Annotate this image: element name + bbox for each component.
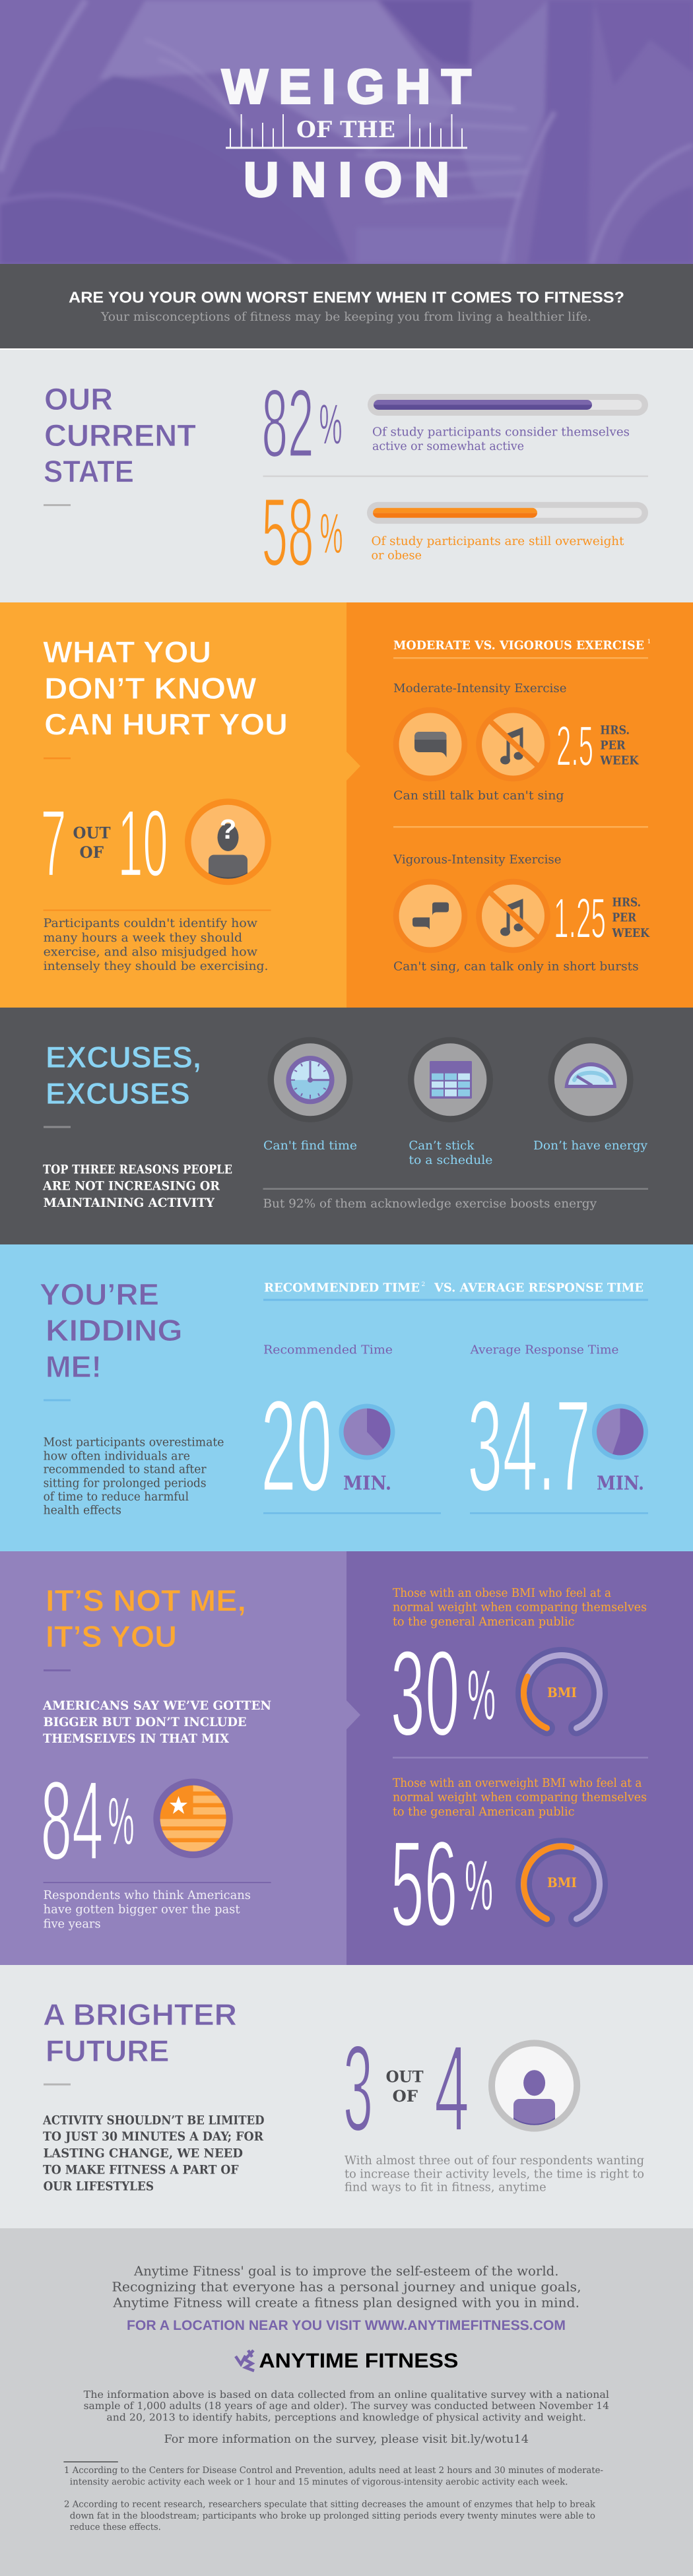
stat: 7 out of 10 xyxy=(41,790,168,896)
stat: 3 out of 4 xyxy=(343,2020,469,2157)
stat: 58%: 58 xyxy=(261,478,314,587)
icon: energy gauge xyxy=(548,1037,634,1122)
heading: our current state xyxy=(44,381,196,489)
text: top three reasons: TOP THREE REASONS PEOPLE xyxy=(43,1163,232,1176)
panel: a brighter future xyxy=(0,1965,693,2228)
footnote 1: intensity aerobic activity each week or 1 hour and 15 minutes of vigorous-intensity aerobic activity each week. xyxy=(70,2476,568,2487)
pie chart: 20 minutes xyxy=(339,1404,395,1460)
heading: it's not me, it's you: IT’S NOT ME, xyxy=(46,1584,246,1618)
text: survey information xyxy=(84,2389,609,2446)
label: vigorous-intensity exercise: Vigorous-Intensity Exercise xyxy=(393,853,561,867)
text: most participants overestimate: how often individuals are xyxy=(44,1449,190,1463)
panel: excuses xyxy=(0,1008,693,1244)
text: overweight bmi: to the general American public xyxy=(393,1805,574,1819)
title: Weight of the Union xyxy=(222,59,471,207)
heading: you're kidding me: KIDDING xyxy=(46,1313,183,1347)
icon: talking xyxy=(393,707,467,781)
text: participants couldn't identify: intensely they should be exercising. xyxy=(44,959,268,973)
caption: can't sing: Can't sing, can talk only in short bursts xyxy=(393,960,639,974)
icon: person xyxy=(488,2040,580,2139)
panel: you're kidding me xyxy=(0,1244,693,1551)
labels: excuses: Can’t stick xyxy=(409,1139,475,1153)
gauge: bmi 56%: BMI xyxy=(547,1875,577,1890)
text: respondents who think xyxy=(44,1888,251,1931)
gauge: bmi 30% xyxy=(523,1655,599,1728)
heading: excuses, excuses: EXCUSES, xyxy=(46,1040,201,1074)
panel: our current state xyxy=(0,350,693,602)
icon: no singing xyxy=(476,879,550,953)
text: with almost three out of four: find ways to fit in fitness, anytime xyxy=(345,2181,546,2195)
text: participants couldn't identify xyxy=(44,917,268,973)
text: obese bmi: normal weight when comparing themselves xyxy=(393,1601,647,1615)
stat: 1.25 hrs per week: 1.25 xyxy=(554,887,606,950)
panel: bmi perception (right) xyxy=(346,1551,693,1965)
pie chart: 34.7 minutes xyxy=(592,1404,648,1460)
text: obese bmi: Those with an obese BMI who feel at a xyxy=(393,1586,611,1600)
stat: 2.5 hrs per week: 2.5 xyxy=(556,715,593,778)
text: activity shouldn't be limited: TO JUST 30 MINUTES A DAY; FOR xyxy=(43,2130,264,2144)
stat: 3 out of 4: OUT xyxy=(386,2067,424,2086)
text: respondents who think: have gotten bigger over the past xyxy=(44,1903,240,1917)
caption: can still talk: Can still talk but can't sing xyxy=(393,789,564,802)
stat: 1.25 hrs per week: HRS. xyxy=(612,895,641,909)
heading: what you don't know can hurt you: CAN HURT YOU xyxy=(44,707,288,742)
text: overweight bmi: normal weight when comparing themselves xyxy=(393,1791,647,1805)
logo: anytime fitness: ANYTIME FITNESS xyxy=(259,2349,458,2372)
stat: 3 out of 4: OF xyxy=(393,2086,418,2106)
panel: you're kidding me: 20 xyxy=(261,1372,332,1519)
stat: 30%: 30 xyxy=(391,1626,459,1762)
text: activity shouldn't be limited: LASTING CHANGE, WE NEED xyxy=(44,2146,243,2160)
heading: what you don't know can hurt you: DON’T KNOW xyxy=(44,671,257,705)
icon: calendar xyxy=(408,1037,493,1122)
heading: recommended vs average: VS. AVERAGE RESPONSE TIME xyxy=(434,1281,644,1295)
text: activity shouldn't be limited: ACTIVITY SHOULDN’T BE LIMITED xyxy=(42,2113,265,2127)
title: Weight of the Union: OF THE xyxy=(296,117,395,143)
text: anytime fitness goal: Anytime Fitness will create a fitness plan designed with you in mind. xyxy=(112,2296,579,2311)
text: most participants overestimate: sitting for prolonged periods xyxy=(44,1476,207,1490)
progress bar: 82% xyxy=(368,394,648,416)
panel: it's not me (left) xyxy=(0,1551,346,1965)
text: americans say: BIGGER BUT DON’T INCLUDE xyxy=(44,1716,247,1729)
caption: 58%: Of study participants are still overweight xyxy=(371,534,624,548)
stat: 82%: 82 xyxy=(261,370,314,478)
title: Weight of the Union: WEIGHT xyxy=(222,59,471,113)
caption: 82%: active or somewhat active xyxy=(372,439,524,453)
heading: you're kidding me: YOU’RE xyxy=(40,1277,159,1312)
labels: excuses xyxy=(263,1139,648,1167)
heading: excuses, excuses: EXCUSES xyxy=(46,1076,190,1111)
text: with almost three out of four: to increase their activity levels, the time is right to xyxy=(345,2168,644,2181)
text: activity shouldn't be limited xyxy=(42,2113,265,2193)
text: most participants overestimate xyxy=(44,1436,224,1517)
intro subtitle: Your misconceptions of fitness may be keeping you from living a healthier life. xyxy=(100,310,591,324)
text: top three reasons: MAINTAINING ACTIVITY xyxy=(44,1196,215,1210)
labels: excuses: Can't find time xyxy=(263,1139,357,1153)
stat: 1.25 hrs per week: WEEK xyxy=(612,926,650,940)
text: most participants overestimate: health effects xyxy=(44,1503,121,1517)
heading: a brighter future xyxy=(43,1997,237,2068)
panel: footer xyxy=(0,2228,693,2576)
heading: recommended vs average: RECOMMENDED TIME xyxy=(264,1281,420,1295)
heading: you're kidding me xyxy=(40,1277,183,1384)
heading: what you don't know can hurt you: WHAT YOU xyxy=(43,635,211,669)
heading: you're kidding me: ME! xyxy=(46,1349,102,1384)
text: top three reasons xyxy=(42,1163,232,1210)
icon: confused person xyxy=(185,798,271,888)
caption: 58%: or obese xyxy=(371,549,422,563)
text: overweight bmi xyxy=(393,1776,647,1819)
icon: short bursts xyxy=(393,879,467,953)
stat: 1.25 hrs per week: PER xyxy=(612,911,637,925)
stat: 56%: 56 xyxy=(391,1816,458,1952)
footnote 2 xyxy=(64,2499,596,2532)
text: activity shouldn't be limited: OUR LIFESTYLES xyxy=(44,2179,154,2193)
text: survey information: For more information on the survey, please visit bit.ly/wotu14 xyxy=(164,2433,529,2446)
stat: 3 out of 4: 4 xyxy=(434,2020,469,2157)
panel: our current state: % xyxy=(319,502,343,565)
text: survey information: The information above is based on data collected from an online qualitative survey with a national xyxy=(84,2389,609,2400)
heading: our current state: STATE xyxy=(44,454,134,489)
stat: 7 out of 10: OUT xyxy=(73,823,111,843)
text: overweight bmi: Those with an overweight BMI who feel at a xyxy=(393,1776,642,1790)
panel: what you don't know (left): 10 xyxy=(117,790,168,896)
text: most participants overestimate: of time to reduce harmful xyxy=(44,1490,189,1504)
text: anytime fitness goal: Anytime Fitness' goal is to improve the self-esteem of the world. xyxy=(133,2263,558,2279)
panel: hero header xyxy=(0,0,693,264)
heading: it's not me, it's you xyxy=(46,1584,246,1654)
text: activity shouldn't be limited: TO MAKE FITNESS A PART OF xyxy=(43,2163,239,2177)
labels: excuses: to a schedule xyxy=(409,1153,492,1167)
heading: excuses, excuses xyxy=(46,1040,201,1111)
icon: confused person: ? xyxy=(220,814,236,845)
labels: excuses: Don’t have energy xyxy=(533,1139,648,1153)
panel: bmi perception (right): % xyxy=(465,1845,493,1925)
panel: moderate vs vigorous (right) xyxy=(346,602,693,1008)
panel: it's not me (left): % xyxy=(108,1784,135,1859)
text: 92% acknowledge: But 92% of them acknowledge exercise boosts energy xyxy=(263,1197,597,1211)
footnote 2: reduce these effects. xyxy=(70,2522,161,2532)
text: anytime fitness goal xyxy=(112,2263,581,2311)
text: participants couldn't identify: many hours a week they should xyxy=(44,931,242,945)
heading: a brighter future: FUTURE xyxy=(46,2034,169,2068)
caption: 82%: Of study participants consider themselves xyxy=(372,426,630,439)
heading: recommended vs average: 2 xyxy=(421,1281,425,1288)
footnote 2: down fat in the bloodstream; participants who broke up prolonged sitting periods every twenty minutes were able to xyxy=(70,2511,595,2521)
stat: 2.5 hrs per week: HRS. xyxy=(600,723,630,738)
text: most participants overestimate: recommended to stand after xyxy=(44,1463,207,1477)
panel: our current state: % xyxy=(319,393,342,457)
heading: our current state: CURRENT xyxy=(44,418,196,453)
icon: american flag xyxy=(153,1779,233,1858)
heading: what you don't know can hurt you xyxy=(43,635,288,742)
text: americans say xyxy=(42,1699,271,1746)
footnote 2: 2 According to recent research, researchers speculate that sitting decreases the amount of enzymes that help to break xyxy=(64,2499,596,2510)
icon: clock xyxy=(267,1037,353,1122)
heading: our current state: OUR xyxy=(44,381,113,416)
heading: moderate vs vigorous exercise: MODERATE VS. VIGOROUS EXERCISE xyxy=(393,639,644,653)
heading: moderate vs vigorous exercise: 1 xyxy=(647,639,651,645)
label: min: MIN. xyxy=(343,1472,391,1495)
text: obese bmi xyxy=(393,1586,647,1628)
stat: 84%: 84 xyxy=(41,1758,103,1884)
text: americans say: THEMSELVES IN THAT MIX xyxy=(43,1732,230,1746)
stat: 2.5 hrs per week: WEEK xyxy=(599,754,640,767)
text: respondents who think: Respondents who think Americans xyxy=(44,1888,251,1902)
text: obese bmi: to the general American public xyxy=(393,1615,574,1628)
text: participants couldn't identify: Participants couldn't identify how xyxy=(44,917,258,930)
caption: 82% xyxy=(372,426,630,453)
title: Weight of the Union: UNION xyxy=(244,152,449,207)
gauge: bmi 30%: BMI xyxy=(547,1685,577,1700)
progress bar: 58% xyxy=(367,502,648,524)
text: top three reasons: ARE NOT INCREASING OR xyxy=(42,1180,220,1194)
label: recommended time: Recommended Time xyxy=(263,1343,393,1357)
stat: 3 out of 4: 3 xyxy=(343,2020,373,2157)
caption: 58% xyxy=(371,534,624,563)
text: with almost three out of four xyxy=(345,2154,644,2195)
stat: 2.5 hrs per week: PER xyxy=(600,738,626,752)
call to action: FOR A LOCATION NEAR YOU VISIT WWW.ANYTIMEFITNESS.COM xyxy=(127,2318,566,2333)
text: participants couldn't identify: exercise, and also misjudged how xyxy=(44,945,258,959)
footnote 1: 1 According to the Centers for Disease Control and Prevention, adults need at least 2 hours and 30 minutes of moderate- xyxy=(64,2465,603,2476)
heading: recommended vs average xyxy=(264,1281,644,1295)
icon: no singing xyxy=(476,707,550,781)
gauge: bmi 56% xyxy=(523,1846,599,1919)
panel: intro band xyxy=(0,264,693,350)
text: americans say: AMERICANS SAY WE’VE GOTTEN xyxy=(42,1699,271,1713)
heading: it's not me, it's you: IT’S YOU xyxy=(46,1619,177,1654)
text: with almost three out of four: With almost three out of four respondents wanting xyxy=(345,2154,644,2168)
text: survey information: sample of 1,000 adults (18 years of age and older). The survey was conducted between November 14 xyxy=(84,2400,609,2412)
panel: what you don't know (left) xyxy=(0,602,346,1008)
text: most participants overestimate: Most participants overestimate xyxy=(44,1436,224,1450)
hero photo background xyxy=(0,0,693,264)
label: average response time: Average Response Time xyxy=(469,1343,619,1357)
panel: bmi perception (right): % xyxy=(467,1655,496,1735)
text: survey information: and 20, 2013 to identify habits, perceptions and knowledge of physical activity and weight. xyxy=(106,2411,586,2423)
text: anytime fitness goal: Recognizing that everyone has a personal journey and unique goals, xyxy=(112,2280,581,2295)
label: min: MIN. xyxy=(597,1472,644,1495)
intro question: ARE YOU YOUR OWN WORST ENEMY WHEN IT COMES TO FITNESS? xyxy=(69,289,624,306)
text: respondents who think: five years xyxy=(44,1917,101,1931)
stat: 7 out of 10: OF xyxy=(79,843,104,862)
footnote 1 xyxy=(64,2465,603,2487)
stat: 7 out of 10: 7 xyxy=(41,790,66,896)
heading: a brighter future: A BRIGHTER xyxy=(43,1997,237,2032)
label: moderate-intensity exercise: Moderate-Intensity Exercise xyxy=(393,682,566,695)
